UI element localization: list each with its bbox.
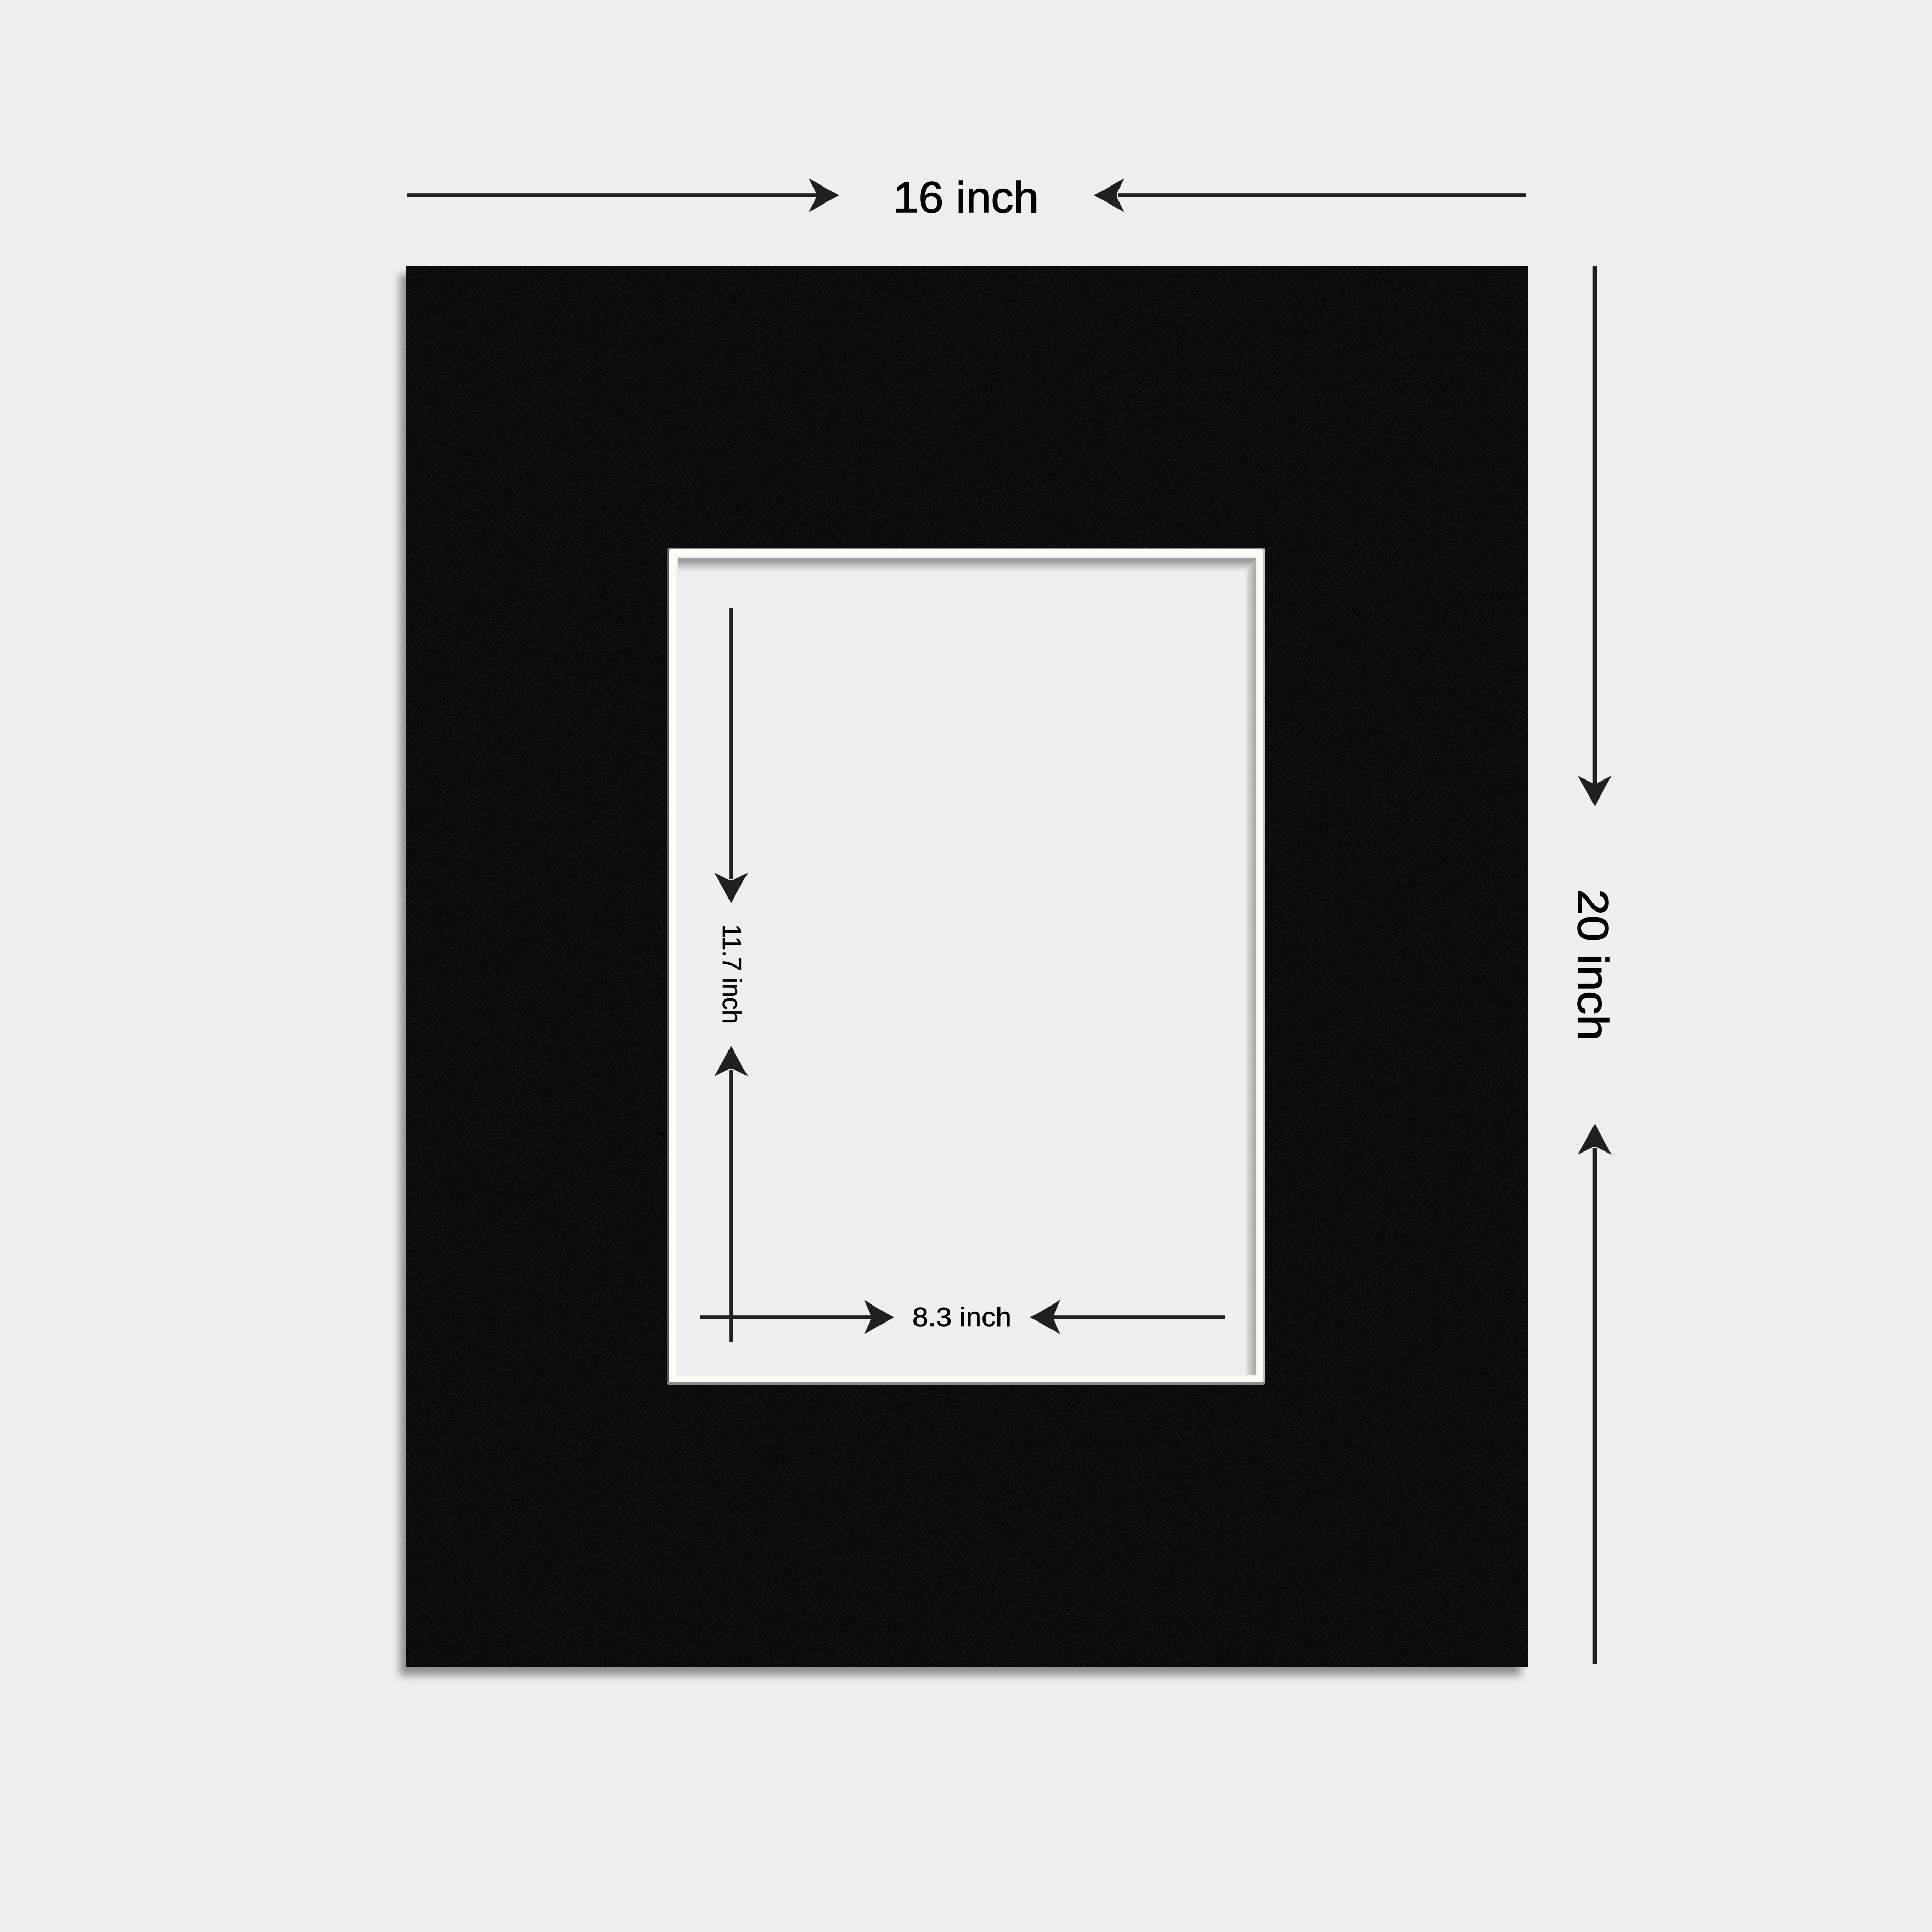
arrow: 20 inch down [1578,266,1612,806]
arrow: 11.7 inch down [714,608,748,903]
arrow: 11.7 inch up [714,1046,748,1342]
label: 16 inch: 16 inch [893,173,1039,222]
window opening [667,548,1265,1385]
arrow: 8.3 inch left [700,1300,894,1334]
arrow: 20 inch up [1578,1124,1612,1664]
arrow: 16 inch right [1094,178,1526,212]
mat board [400,266,1528,1675]
label: 11.7 inch: 11.7 inch [717,924,747,1024]
arrow: 16 inch left [407,178,839,212]
arrow: 8.3 inch right [1030,1300,1225,1334]
label: 8.3 inch: 8.3 inch [912,1302,1011,1332]
label: 20 inch: 20 inch [1569,889,1617,1041]
